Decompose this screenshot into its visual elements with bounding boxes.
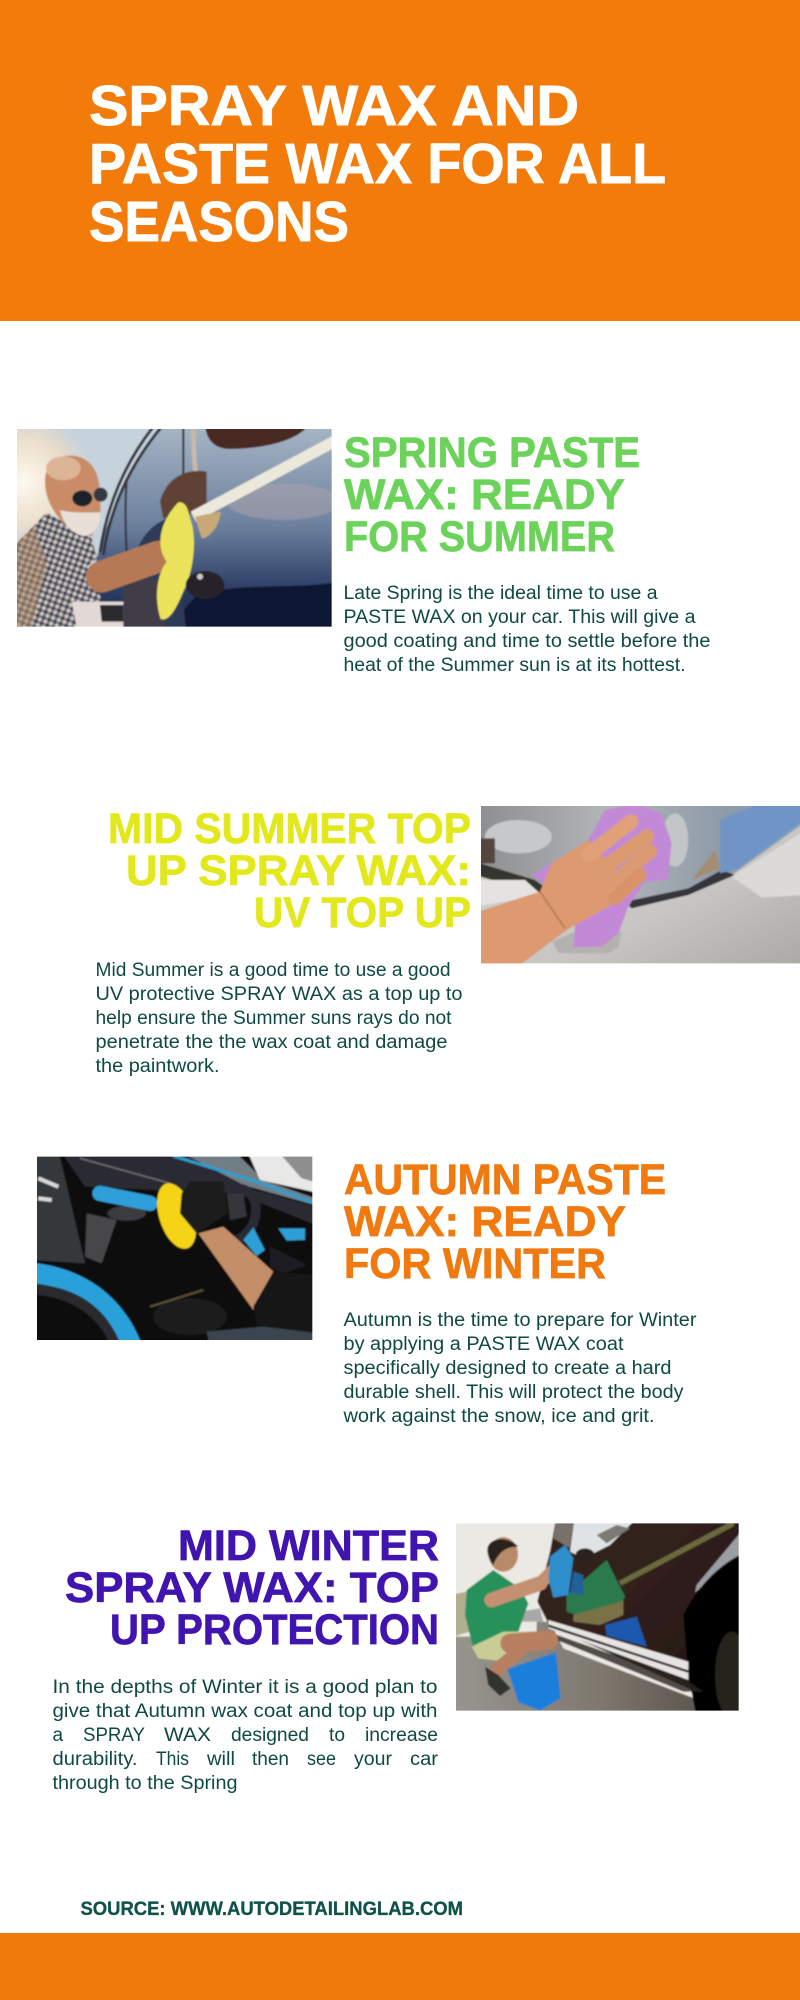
text: spring body: PASTE WAX on your car. This will give a (344, 607, 696, 628)
heading: autumn paste wax (344, 1156, 666, 1288)
text: mid winter body: will (206, 1749, 235, 1770)
text: autumn body: Autumn is the time to prepare for Winter (344, 1310, 697, 1331)
photo: man in green shirt washing dark car with blue bucket (456, 1523, 739, 1711)
text: mid winter body: This (156, 1749, 189, 1770)
photo: man polishing blue car with yellow cloth (17, 429, 332, 627)
text: mid winter body: designed (231, 1725, 309, 1746)
text: autumn body (342, 1310, 697, 1427)
text: mid summer body: UV protective SPRAY WAX as a top up to (96, 984, 462, 1005)
text: mid winter body: durability. (52, 1749, 138, 1770)
heading: autumn paste wax: FOR WINTER (344, 1240, 606, 1288)
text: autumn body: durable shell. This will protect the body (344, 1382, 684, 1403)
text: autumn body: specifically designed to create a hard (344, 1358, 672, 1379)
heading: spring paste wax: FOR SUMMER (344, 513, 615, 561)
source credit: SOURCE: WWW.AUTODETAILINGLAB.COM (80, 1899, 463, 1920)
text: mid winter body: In the depths of Winter it is a good plan to (52, 1677, 438, 1698)
heading: spring paste wax: WAX: READY (344, 471, 625, 519)
title: SEASONS (89, 190, 349, 253)
text: mid winter body (52, 1677, 439, 1794)
text: mid winter body: SPRAY (83, 1725, 145, 1746)
heading: mid winter spray wax: SPRAY WAX: TOP (65, 1564, 439, 1612)
title: SPRAY WAX AND (89, 74, 579, 137)
heading: mid winter spray wax (65, 1522, 439, 1654)
photo: hand wiping headlight with purple cloth (475, 800, 800, 970)
text: mid winter body: WAX (164, 1725, 211, 1746)
photo: gloved hand polishing black car with yellow pad (37, 1156, 312, 1340)
heading: mid summer top up spray wax (108, 805, 471, 937)
text: mid summer body: Mid Summer is a good time to use a good (96, 960, 450, 981)
text: mid summer body: the paintwork. (96, 1056, 220, 1077)
text: mid winter body: increase (365, 1725, 438, 1746)
title (89, 74, 666, 253)
text: mid winter body: see (307, 1749, 336, 1770)
text: mid winter body: a (52, 1725, 64, 1746)
footer banner (0, 1933, 800, 2000)
text: mid winter body: through to the Spring (52, 1773, 238, 1794)
heading: mid summer top up spray wax: UV TOP UP (254, 889, 471, 937)
heading: autumn paste wax: AUTUMN PASTE (344, 1156, 666, 1204)
heading: autumn paste wax: WAX: READY (344, 1198, 626, 1246)
text: spring body: Late Spring is the ideal time to use a (344, 583, 658, 604)
text: mid winter body: give that Autumn wax coat and top up with (52, 1701, 438, 1722)
text: autumn body: by applying a PASTE WAX coat (344, 1334, 624, 1355)
text: mid winter body: car (410, 1749, 439, 1770)
heading: spring paste wax: SPRING PASTE (344, 429, 640, 477)
text: autumn body: work against the snow, ice and grit. (342, 1406, 654, 1427)
text: spring body (344, 583, 710, 676)
heading: spring paste wax (344, 429, 640, 561)
heading: mid summer top up spray wax: MID SUMMER TOP (108, 805, 471, 853)
text: mid summer body: help ensure the Summer suns rays do not (96, 1008, 452, 1029)
heading: mid winter spray wax: MID WINTER (178, 1522, 439, 1570)
text: mid summer body: penetrate the the wax coat and damage (96, 1032, 448, 1053)
text: mid winter body: then (252, 1749, 289, 1770)
title: PASTE WAX FOR ALL (89, 132, 666, 195)
heading: mid winter spray wax: UP PROTECTION (110, 1606, 439, 1654)
header banner (0, 0, 800, 321)
text: mid winter body: your (354, 1749, 393, 1770)
text: spring body: good coating and time to settle before the (344, 631, 710, 652)
heading: mid summer top up spray wax: UP SPRAY WAX: (126, 847, 471, 895)
text: mid summer body (96, 960, 462, 1077)
text: spring body: heat of the Summer sun is at its hottest. (344, 655, 686, 676)
text: mid winter body: to (329, 1725, 345, 1746)
